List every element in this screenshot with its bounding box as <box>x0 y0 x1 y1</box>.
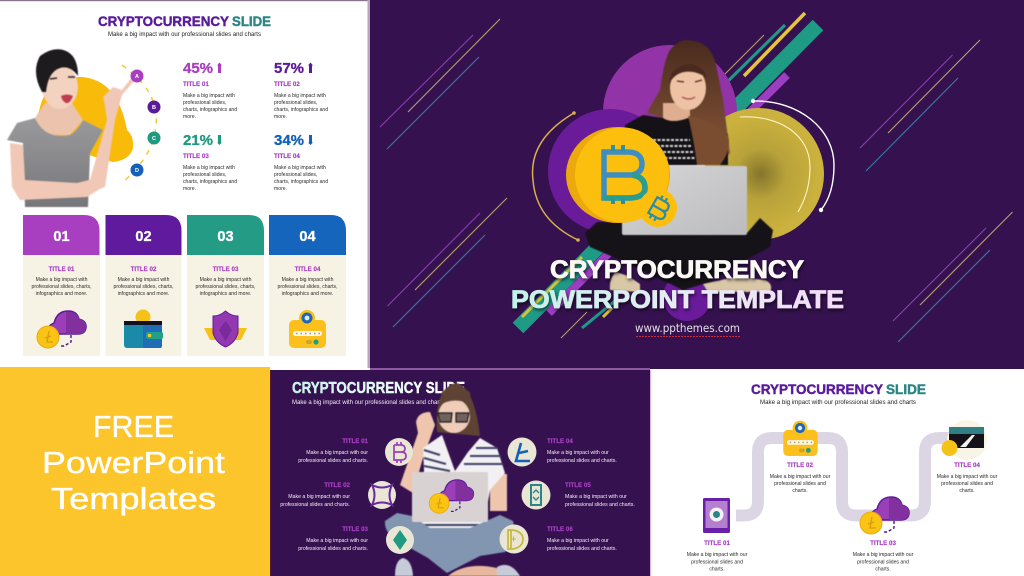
icon: cloud coin <box>860 497 909 534</box>
step 01 text: charts. <box>709 566 725 572</box>
step 04 text <box>937 462 998 494</box>
panel: top-left light slide <box>0 0 370 368</box>
right text blocks: professional slides and charts. <box>547 458 617 464</box>
step 03 text: charts. <box>875 566 891 572</box>
panel: bottom-right light slide <box>650 370 1024 576</box>
step 04 text: Make a big impact with our <box>937 474 998 480</box>
stat 03: Make a big impact with <box>183 165 235 171</box>
icon: star circle <box>368 481 396 509</box>
stat 04: professional slides, <box>274 172 317 178</box>
left text blocks: professional slides and charts. <box>298 458 368 464</box>
icon: ethereum circle <box>386 526 414 554</box>
left text blocks: TITLE 01 <box>342 438 369 445</box>
card 01: infographics and more. <box>36 291 87 297</box>
stat 04: 34% <box>274 132 304 149</box>
left text blocks: TITLE 02 <box>324 482 351 489</box>
card 03: 03 <box>217 229 234 245</box>
step 02 text: Make a big impact with our <box>770 474 831 480</box>
card 04: infographics and more. <box>282 291 333 297</box>
step 04 text: professional slides and <box>941 481 993 487</box>
stat 02: charts, infographics and <box>274 107 328 113</box>
background circles <box>548 45 824 321</box>
card 01: 01 <box>53 229 70 245</box>
slide subtitle: Make a big impact with our professional slides and charts <box>108 32 261 38</box>
right text blocks: Make a big impact with our <box>565 494 627 500</box>
right text blocks: TITLE 04 <box>547 438 573 445</box>
stat 02 <box>274 60 328 120</box>
step 02 text: charts. <box>792 488 808 494</box>
stat 01: professional slides, <box>183 100 226 106</box>
step 03 text <box>853 540 914 572</box>
free templates text: PowerPoint <box>42 445 225 480</box>
panel: yellow free templates <box>0 367 270 576</box>
stat 04 <box>274 132 328 192</box>
cover title: POWERPOINT TEMPLATE <box>511 286 844 314</box>
stat 04: more. <box>274 186 287 192</box>
stat 03: 21% <box>183 132 213 149</box>
card 02: Make a big impact with <box>118 277 170 283</box>
option markers A to D: A <box>135 74 139 80</box>
step 04 text: charts. <box>959 488 975 494</box>
slide title: CRYPTOCURRENCY <box>98 13 230 29</box>
icon: tablet <box>703 498 730 533</box>
left text blocks: professional slides and charts. <box>280 502 350 508</box>
seated woman with laptop <box>585 40 773 292</box>
step 02 text <box>770 462 831 494</box>
central diagonal bands <box>518 13 818 338</box>
light slide title: CRYPTOCURRENCY <box>751 381 884 397</box>
card 04 <box>269 215 346 356</box>
stat 03: more. <box>183 186 196 192</box>
stat 02: Make a big impact with <box>274 93 326 99</box>
card 02: TITLE 02 <box>131 266 157 273</box>
bitcoin coin large <box>566 127 670 223</box>
step 01 text <box>687 540 748 572</box>
stat 01: charts, infographics and <box>183 107 237 113</box>
card 03: Make a big impact with <box>200 277 252 283</box>
left text blocks: Make a big impact with our <box>288 494 350 500</box>
dashed yellow arc <box>122 65 156 182</box>
diagonal line groups <box>380 19 1012 342</box>
card 03 <box>187 215 264 356</box>
woman pointing <box>7 49 135 207</box>
card 03: TITLE 03 <box>213 266 239 273</box>
step 02 text: professional slides and <box>774 481 826 487</box>
step 01 text: professional slides and <box>691 560 743 566</box>
right text blocks: Make a big impact with our <box>547 450 609 456</box>
card 01: TITLE 01 <box>49 266 75 273</box>
cover title: CRYPTOCURRENCY <box>550 256 804 284</box>
bitcoin coin small <box>639 189 677 227</box>
stat 04: TITLE 04 <box>274 153 300 160</box>
slide title accent: SLIDE <box>232 13 271 29</box>
right text blocks: TITLE 05 <box>565 482 591 489</box>
stat 04: charts, infographics and <box>274 179 328 185</box>
card 01: Make a big impact with <box>36 277 88 283</box>
step 04 text: TITLE 04 <box>954 462 980 469</box>
card 01 <box>23 215 100 356</box>
stat 02: TITLE 02 <box>274 81 300 88</box>
icon: litecoin circle <box>508 438 536 466</box>
option markers A to D <box>130 70 160 176</box>
step 01 text: Make a big impact with our <box>687 552 748 558</box>
card 04: Make a big impact with <box>282 277 334 283</box>
dark slide title: CRYPTOCURRENCY SLIDE <box>292 380 465 397</box>
stat 03: professional slides, <box>183 172 226 178</box>
step 03 text: TITLE 03 <box>870 540 896 547</box>
option markers A to D: C <box>152 136 156 142</box>
left text blocks: TITLE 03 <box>342 526 369 533</box>
winding timeline path <box>736 438 960 516</box>
icon: bank card <box>942 420 987 460</box>
icon: bitcoin circle <box>385 438 413 466</box>
option markers A to D: D <box>135 168 139 174</box>
icon: lock card <box>783 421 818 456</box>
step 03 text: Make a big impact with our <box>853 552 914 558</box>
stat 01: Make a big impact with <box>183 93 235 99</box>
right text blocks <box>547 438 635 552</box>
card 02: 02 <box>135 229 152 245</box>
stat 01 <box>183 60 237 120</box>
stat 02: professional slides, <box>274 100 317 106</box>
stat 01: TITLE 01 <box>183 81 209 88</box>
icon: bar coin circle <box>522 480 550 510</box>
yellow blob <box>38 77 133 162</box>
card 02: infographics and more. <box>118 291 169 297</box>
right text blocks: Make a big impact with our <box>547 538 609 544</box>
panel: main cover slide <box>370 0 1024 370</box>
right text blocks: TITLE 06 <box>547 526 573 533</box>
left text blocks: Make a big impact with our <box>306 450 368 456</box>
card 02: professional slides, charts, <box>113 284 174 290</box>
icon: laptop cloud <box>429 480 474 513</box>
card 02 <box>106 215 182 356</box>
woman with glasses and laptop <box>385 383 520 576</box>
card 04: 04 <box>299 229 316 245</box>
card 04: professional slides, charts, <box>277 284 338 290</box>
decorative arcs <box>533 99 834 242</box>
card 01: professional slides, charts, <box>31 284 92 290</box>
panel: bottom dark slide <box>270 370 650 576</box>
step 02 text: TITLE 02 <box>787 462 813 469</box>
free templates text: Templates <box>51 481 216 516</box>
right text blocks: professional slides and charts. <box>565 502 635 508</box>
light slide subtitle: Make a big impact with our professional slides and charts <box>760 400 916 406</box>
light slide title accent: SLIDE <box>886 381 926 397</box>
stat 01: more. <box>183 114 196 120</box>
website url: www.ppthemes.com <box>635 321 740 335</box>
card 03: professional slides, charts, <box>195 284 256 290</box>
stat 04: Make a big impact with <box>274 165 326 171</box>
stat 03: charts, infographics and <box>183 179 237 185</box>
cover title <box>511 256 844 314</box>
left text blocks: Make a big impact with our <box>306 538 368 544</box>
stat 02: more. <box>274 114 287 120</box>
stat 01: 45% <box>183 60 213 77</box>
icon: dogecoin circle <box>500 524 528 554</box>
dark slide subtitle: Make a big impact with our professional slides and charts <box>292 400 444 406</box>
step 01 text: TITLE 01 <box>704 540 730 547</box>
step 03 text: professional slides and <box>857 560 909 566</box>
left text blocks <box>280 438 369 552</box>
card 04: TITLE 04 <box>295 266 321 273</box>
right text blocks: professional slides and charts. <box>547 546 617 552</box>
free templates text: FREE <box>93 409 174 444</box>
stat 03: TITLE 03 <box>183 153 209 160</box>
stat 02: 57% <box>274 60 304 77</box>
option markers A to D: B <box>152 105 156 111</box>
stat 03 <box>183 132 237 192</box>
left text blocks: professional slides and charts. <box>298 546 368 552</box>
card 03: infographics and more. <box>200 291 251 297</box>
